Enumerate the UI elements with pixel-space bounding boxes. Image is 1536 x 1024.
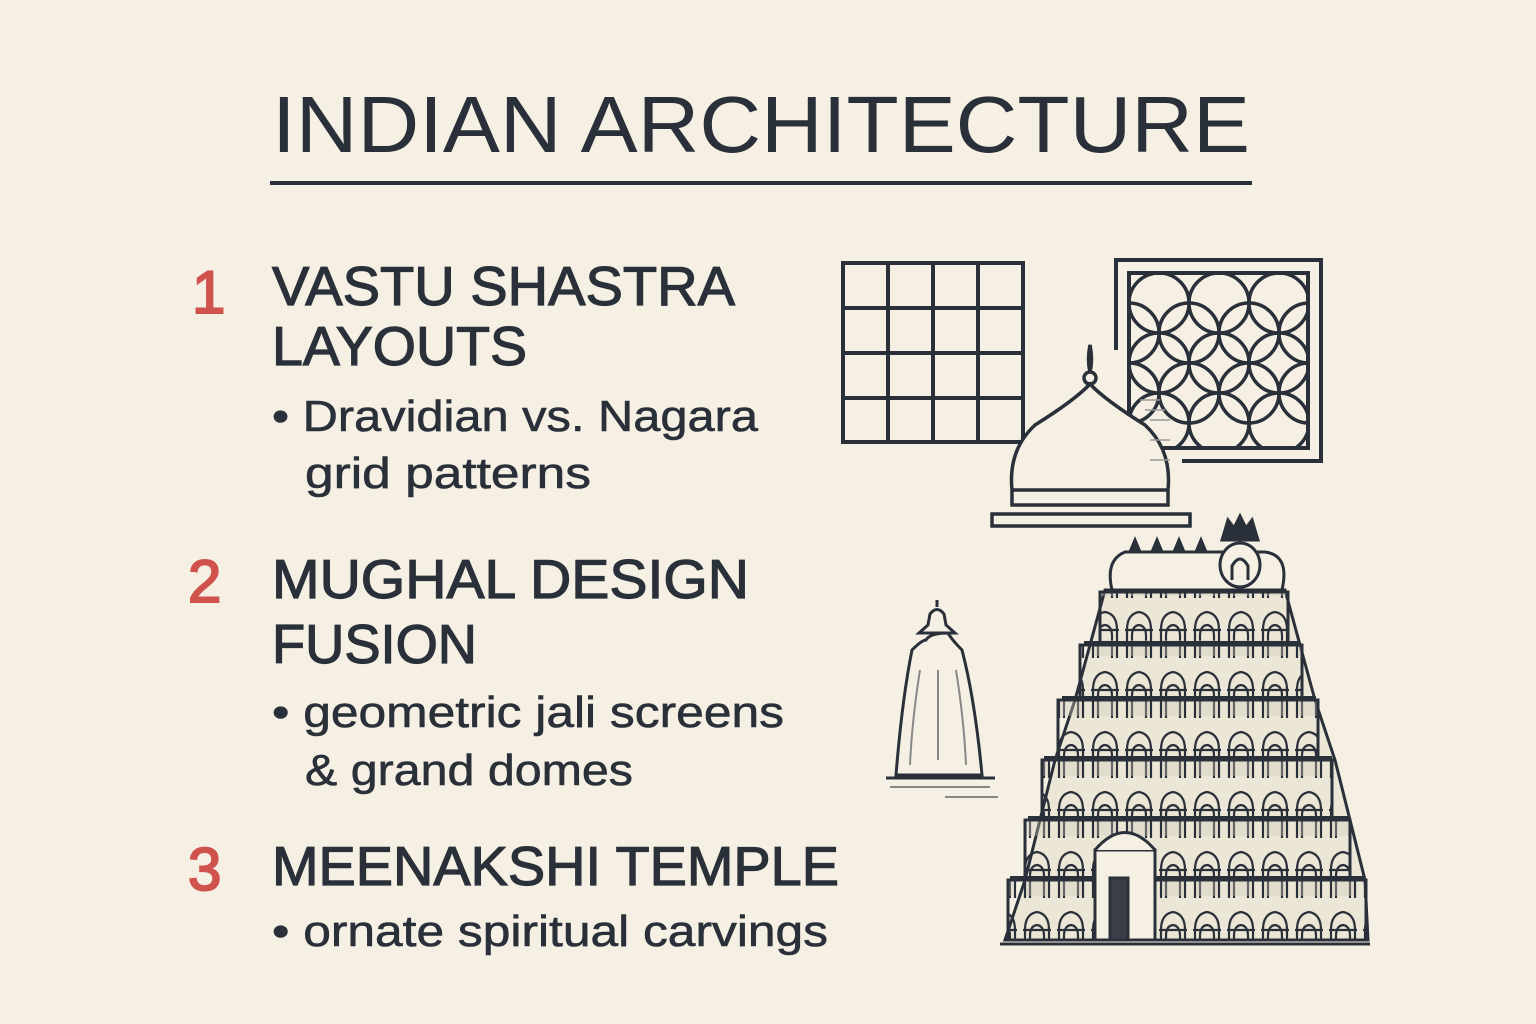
icon: nagara shikhara <box>886 600 998 797</box>
heading 2: MUGHAL DESIGN <box>272 548 749 610</box>
number 1: 1 <box>192 259 225 326</box>
icon: vastu grid <box>843 263 1023 442</box>
heading 3: MEENAKSHI TEMPLE <box>272 835 839 897</box>
icon: jali screen <box>1114 258 1323 463</box>
icon: meenakshi gopuram <box>1000 516 1370 944</box>
section 2: mughal design: FUSION <box>272 613 477 675</box>
bullet 3: • ornate spiritual carvings <box>272 907 828 956</box>
section 2: mughal design: & grand domes <box>305 746 633 795</box>
icon: mughal dome <box>992 345 1190 526</box>
section 2: mughal design <box>188 548 784 795</box>
section 1: vastu shastra: LAYOUTS <box>272 315 527 377</box>
section 1: vastu shastra <box>192 255 759 498</box>
number 2: 2 <box>188 548 221 615</box>
section 3: meenakshi temple <box>188 835 839 956</box>
heading 1: VASTU SHASTRA <box>272 255 735 317</box>
number 3: 3 <box>188 836 221 903</box>
bullet 1: • Dravidian vs. Nagara <box>272 392 759 441</box>
section 1: vastu shastra: grid patterns <box>305 449 591 498</box>
bullet 2: • geometric jali screens <box>272 688 784 737</box>
title: INDIAN ARCHITECTURE <box>272 80 1250 169</box>
